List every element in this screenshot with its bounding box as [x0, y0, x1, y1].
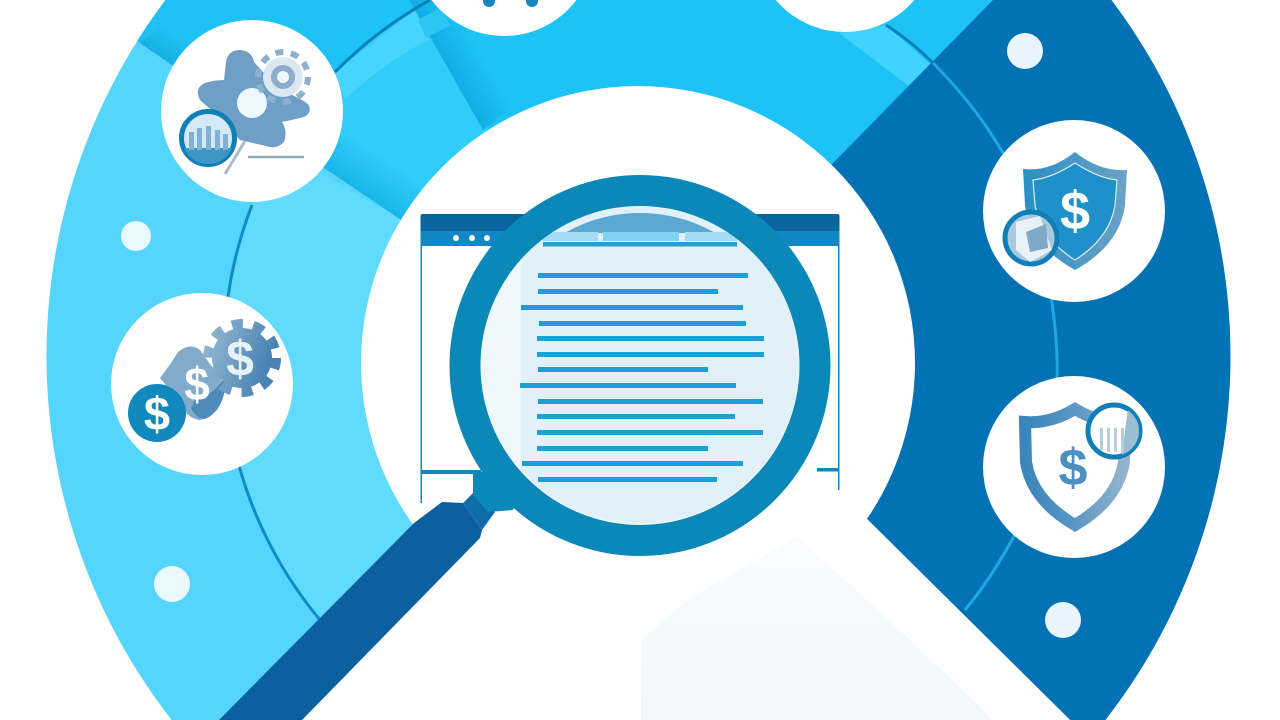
icon: top right cropped circle: [754, 0, 936, 32]
icon: outline shield: [983, 376, 1165, 558]
lens magnified title bar: [566, 213, 714, 233]
shield dollar: $: [1060, 181, 1090, 241]
magnifier ring: [465, 190, 815, 540]
decorative dot: left upper: [121, 221, 151, 251]
left inner fill: [230, 173, 412, 618]
handle strokes: [225, 141, 245, 174]
sector highlight band: [336, 10, 428, 100]
icon: coin and gears: [111, 293, 293, 475]
magnifier handle: [219, 470, 520, 720]
arc: top right dark: [886, 25, 933, 63]
magnifier badge: [182, 112, 234, 164]
segment: top band: [137, 0, 993, 165]
right dollar: $: [226, 331, 254, 387]
bottom white wedge: [302, 380, 1070, 720]
coin: [128, 384, 186, 442]
icon: top left cropped circle: [413, 0, 595, 36]
segment: dark right: [832, 0, 1230, 720]
lens left tint: [481, 260, 521, 470]
segment: inside arc: [230, 10, 930, 618]
icon: solid shield: [983, 120, 1165, 302]
arc: top left dark: [335, 0, 430, 72]
segment: upper-left shading: [137, 0, 166, 41]
right gear: [212, 328, 272, 388]
dark lower gear: [191, 375, 226, 419]
decorative dot: top right: [1007, 33, 1043, 69]
sector fill: [324, 14, 488, 220]
large gear: [198, 50, 310, 147]
faint document shape: [641, 537, 992, 720]
middle gear: [160, 346, 225, 420]
segment: small band by divider: [418, 8, 451, 38]
small gear: [258, 52, 308, 102]
arc: left: [224, 205, 320, 620]
top-right highlight band: [839, 25, 931, 87]
center white circle: [361, 86, 915, 640]
segment: top center shadow: [409, 0, 500, 130]
browser window: [420, 214, 840, 503]
shield dollar: $: [1059, 439, 1088, 497]
segment: upper-left edge shade: [140, 34, 181, 65]
segment: left light blue: [46, 0, 393, 720]
arc: right light: [933, 63, 1057, 610]
lens text lines: [520, 273, 764, 482]
magnifier badge: [1088, 405, 1140, 457]
middle dollar: $: [184, 358, 210, 410]
lens inner rim: [480, 205, 800, 525]
magnifier badge: [1005, 212, 1057, 264]
coin dollar: $: [144, 387, 170, 440]
decorative dot: left lower: [154, 566, 190, 602]
decorative dot: bottom right: [1045, 602, 1081, 638]
icon: gears with magnifier: [161, 20, 343, 202]
magnifier lens and ring: [465, 190, 815, 540]
